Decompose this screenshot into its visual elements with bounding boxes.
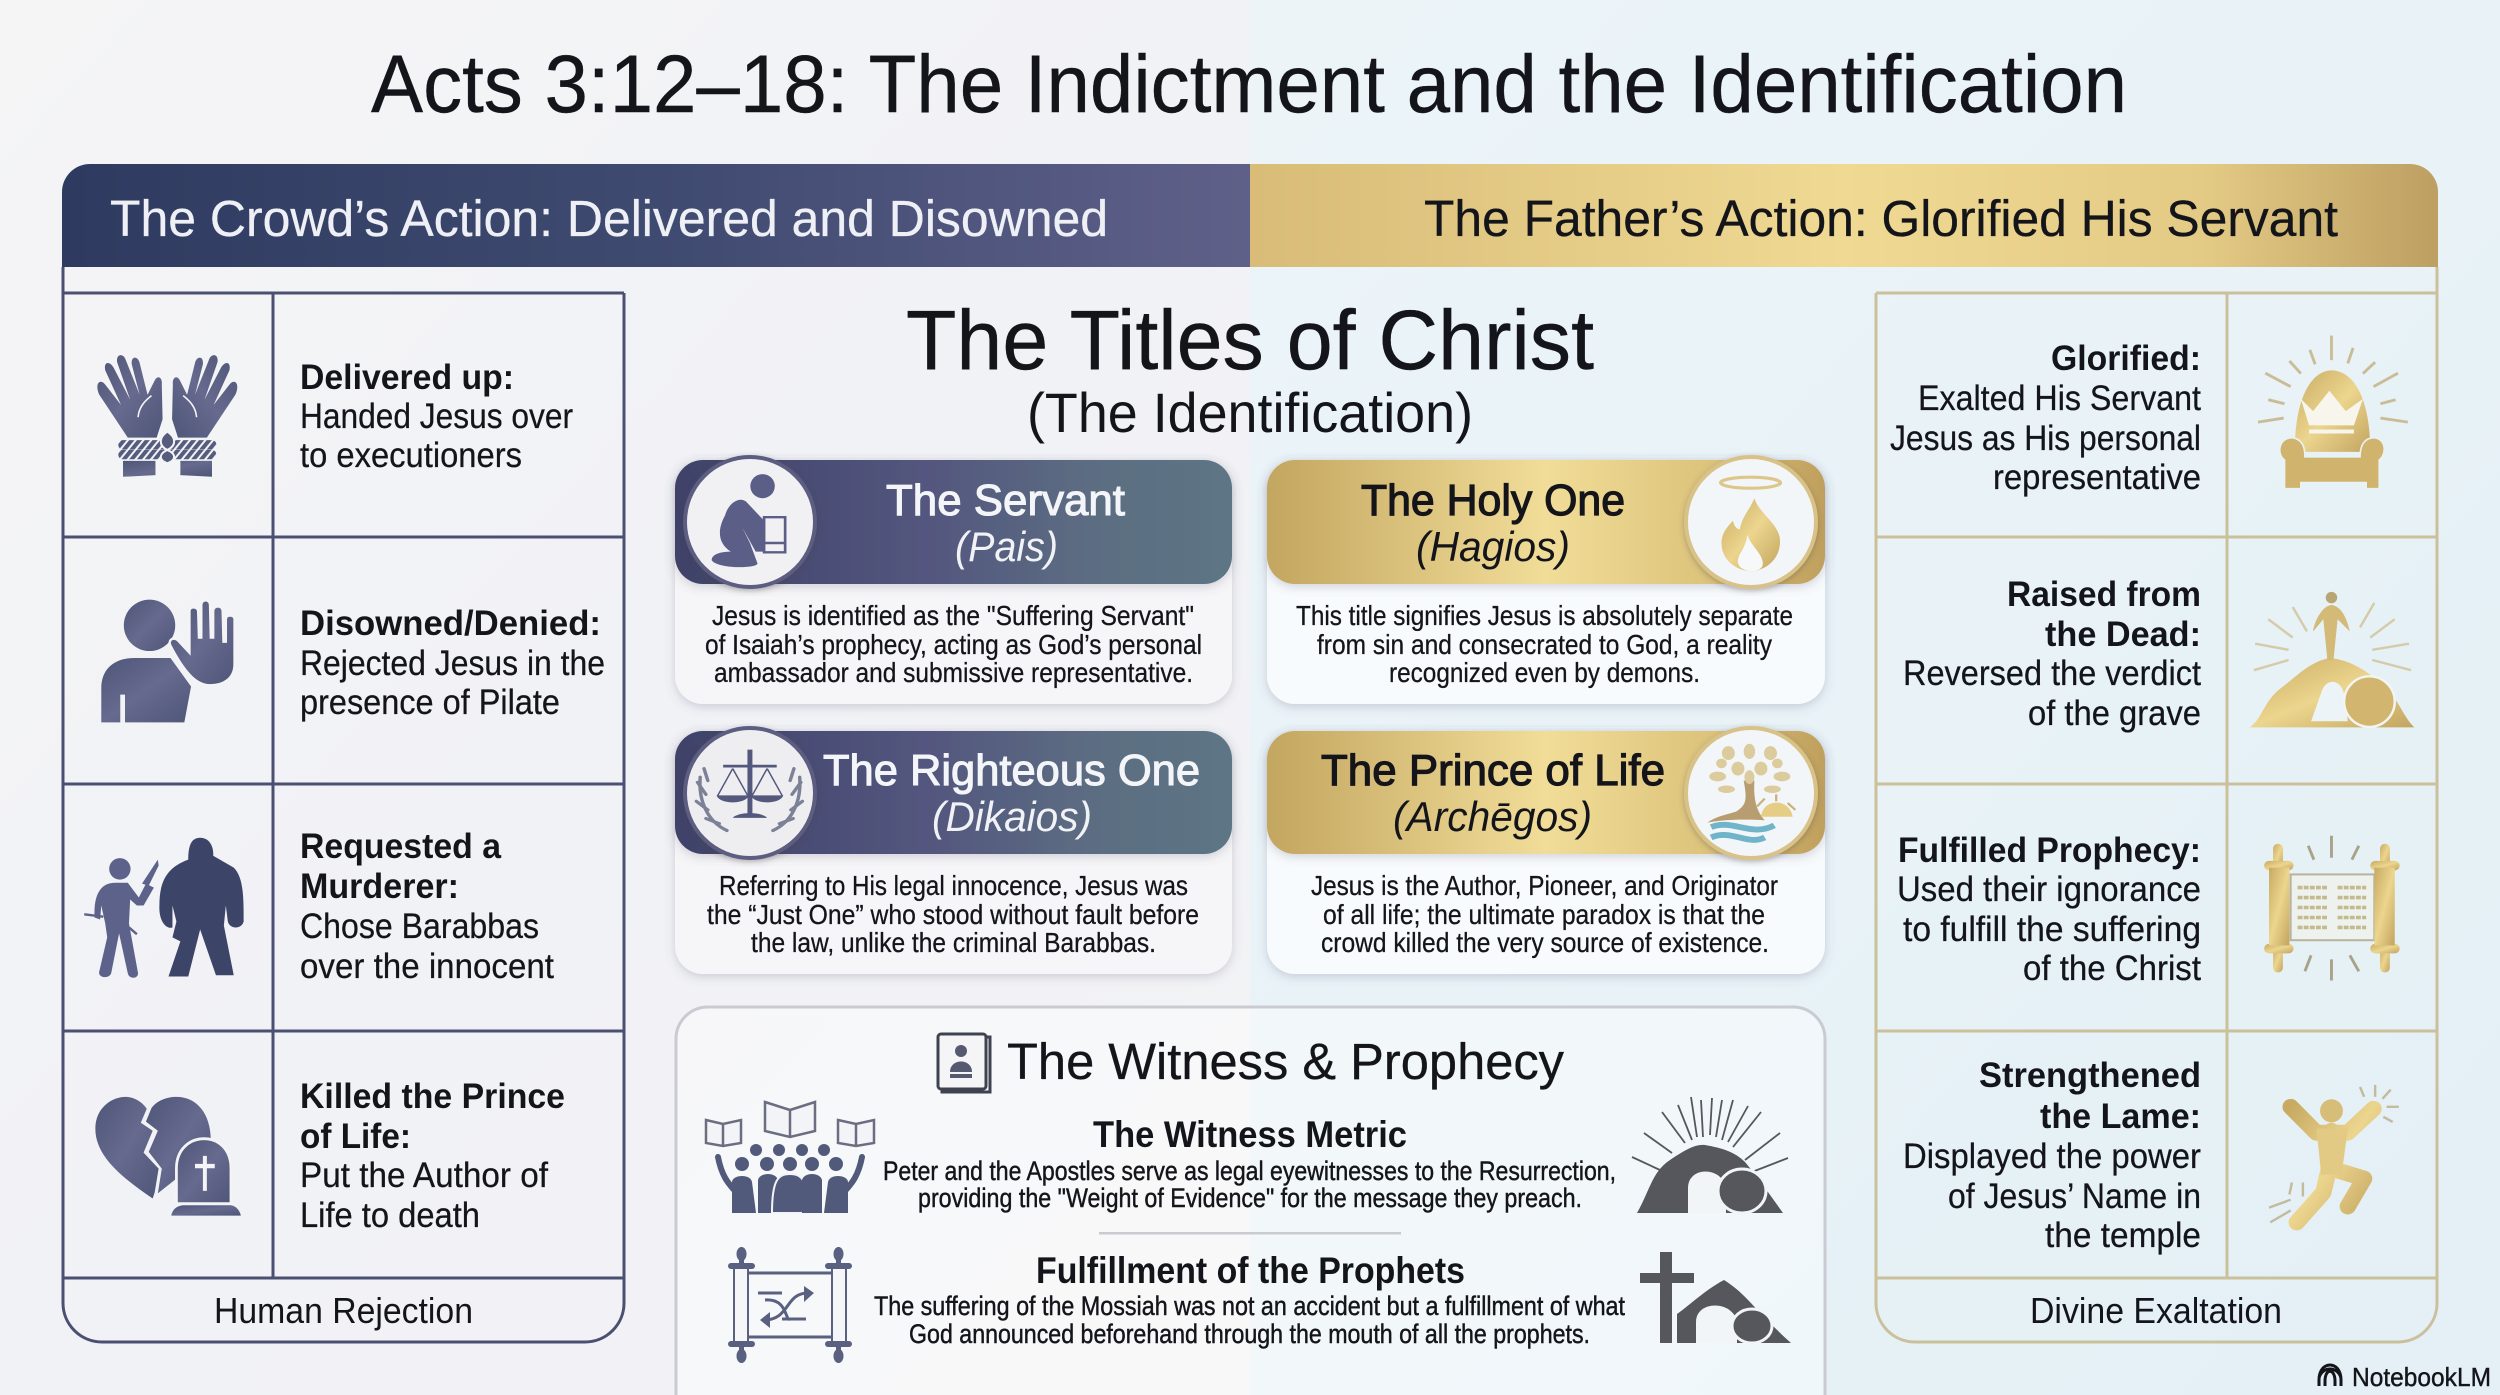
subheading: fulfillment: Fulfillment of the Prophets xyxy=(1036,1250,1465,1291)
card: the holy one xyxy=(1267,457,1825,704)
text: strengthened the lame: Strengthened xyxy=(1979,1056,2201,1095)
icon: scroll with swap arrows xyxy=(728,1247,852,1363)
icon: tree of life xyxy=(1707,744,1795,840)
text: disowned: presence of Pilate xyxy=(300,683,560,722)
text: disowned xyxy=(300,604,605,722)
text: raised from the dead: of the grave xyxy=(2028,694,2201,733)
text: disowned: Disowned/Denied: xyxy=(300,604,601,643)
description: of all life; the ultimate paradox is that the xyxy=(1323,899,1765,930)
text: strengthened the lame xyxy=(1903,1056,2201,1255)
table grid xyxy=(63,267,624,1342)
text: glorified xyxy=(1890,339,2201,497)
text: glorified: representative xyxy=(1993,458,2201,497)
title: Acts 3:12–18: The Indictment and the Identification xyxy=(371,39,2127,130)
title: The Righteous One xyxy=(823,746,1200,795)
text: requested a murderer: Murderer: xyxy=(300,867,459,906)
description: the law, unlike the criminal Barabbas. xyxy=(751,927,1156,958)
text: raised from the dead: Raised from xyxy=(2007,575,2201,614)
title: The Prince of Life xyxy=(1321,746,1665,795)
text: fulfilled prophecy: Fulfilled Prophecy: xyxy=(1898,831,2201,870)
card: the righteous one xyxy=(675,728,1232,974)
icon: kneeling servant xyxy=(712,474,785,567)
text: strengthened the lame: the temple xyxy=(2045,1216,2201,1255)
header banner xyxy=(62,164,2438,267)
description: fulfillment xyxy=(874,1291,1625,1349)
icon: man and murderer xyxy=(84,838,244,978)
description: This title signifies Jesus is absolutely separate xyxy=(1296,600,1793,631)
description xyxy=(1296,600,1793,688)
text: disowned: Rejected Jesus in the xyxy=(300,644,605,683)
subtitle: (Archēgos) xyxy=(1393,793,1592,840)
description: fulfillment: God announced beforehand through the mouth of all the prophets. xyxy=(909,1319,1590,1349)
text: killed the prince: Put the Author of xyxy=(300,1156,548,1195)
text: killed the prince: Killed the Prince xyxy=(300,1077,565,1116)
icon: gold scroll xyxy=(2264,836,2400,980)
text: strengthened the lame: the Lame: xyxy=(2040,1097,2201,1136)
description: fulfillment: The suffering of the Mossiah was not an accident but a fulfillment of what xyxy=(874,1291,1625,1321)
icon: witness book xyxy=(938,1034,990,1092)
icon: halo and flame xyxy=(1721,477,1780,571)
subheading: witness metric: The Witness Metric xyxy=(1093,1114,1407,1155)
text: fulfilled prophecy: to fulfill the suffering xyxy=(1903,910,2201,949)
text: raised from the dead: Reversed the verdict xyxy=(1903,654,2201,693)
icon: crown and throne xyxy=(2258,336,2408,489)
text: killed the prince xyxy=(300,1077,565,1235)
text: strengthened the lame: of Jesus’ Name in xyxy=(1948,1177,2201,1216)
text: killed the prince: of Life: xyxy=(300,1117,411,1156)
icon: apostles with books xyxy=(706,1102,874,1213)
heading: titles of christ: The Titles of Christ xyxy=(906,293,1594,387)
heading: titles of christ: (The Identification) xyxy=(1027,381,1473,444)
text: delivered up xyxy=(300,358,573,475)
text: requested a murderer: over the innocent xyxy=(300,947,554,986)
subtitle: (Dikaios) xyxy=(932,793,1092,840)
text: fulfilled prophecy xyxy=(1897,831,2201,988)
heading: titles of christ xyxy=(906,293,1594,444)
description: witness metric: providing the "Weight of Evidence" for the message they preach. xyxy=(918,1183,1582,1213)
icon: person raising hand xyxy=(101,600,235,722)
icon: cross and tomb xyxy=(1640,1252,1791,1343)
text: raised from the dead xyxy=(1903,575,2201,733)
text: strengthened the lame: Displayed the power xyxy=(1903,1137,2201,1176)
description: Jesus is identified as the "Suffering Servant" xyxy=(712,600,1194,631)
text: delivered up: to executioners xyxy=(300,436,522,475)
description: of Isaiah’s prophecy, acting as God’s personal xyxy=(705,629,1202,660)
subtitle: (Hagios) xyxy=(1416,523,1570,570)
icon: leaping man xyxy=(2269,1085,2399,1222)
description: ambassador and submissive representative. xyxy=(714,657,1193,688)
description: witness metric: Peter and the Apostles serve as legal eyewitnesses to the Resurrection, xyxy=(883,1156,1616,1186)
description: Jesus is the Author, Pioneer, and Originator xyxy=(1311,870,1778,901)
icon: risen figure over tomb xyxy=(2250,592,2414,727)
text: delivered up: Delivered up: xyxy=(300,358,514,397)
label: divine exaltation: Divine Exaltation xyxy=(2030,1290,2282,1331)
logo: notebooklm: NotebookLM xyxy=(2352,1362,2491,1392)
title: The Holy One xyxy=(1361,476,1625,525)
description: witness metric xyxy=(883,1156,1616,1213)
panel: divine exaltation xyxy=(1876,267,2437,1342)
heading: The Witness & Prophecy xyxy=(1007,1033,1564,1090)
label: human rejection: Human Rejection xyxy=(214,1290,473,1331)
text: delivered up: Handed Jesus over xyxy=(300,397,573,436)
text: fulfilled prophecy: of the Christ xyxy=(2023,949,2201,988)
text: killed the prince: Life to death xyxy=(300,1196,480,1235)
text: requested a murderer: Chose Barabbas xyxy=(300,907,539,946)
description: from sin and consecrated to God, a reality xyxy=(1317,629,1772,660)
panel: witness and prophecy xyxy=(676,1007,1825,1395)
text: glorified: Exalted His Servant xyxy=(1918,379,2201,418)
text: raised from the dead: the Dead: xyxy=(2045,615,2201,654)
description: the “Just One” who stood without fault before xyxy=(707,899,1199,930)
description xyxy=(707,870,1199,958)
icon: bound hands xyxy=(97,355,237,477)
heading: crowd's action: The Crowd’s Action: Delivered and Disowned xyxy=(110,190,1108,247)
card: the servant xyxy=(675,457,1232,704)
text: glorified: Jesus as His personal xyxy=(1890,419,2201,458)
panel: human rejection xyxy=(63,267,624,1342)
divider xyxy=(1099,1232,1401,1234)
description: Referring to His legal innocence, Jesus was xyxy=(719,870,1188,901)
card: the prince of life xyxy=(1267,728,1825,974)
icon: scales and laurel xyxy=(696,750,802,831)
text: fulfilled prophecy: Used their ignorance xyxy=(1897,870,2201,909)
heading: father's action: The Father’s Action: Glorified His Servant xyxy=(1424,190,2338,247)
text: glorified: Glorified: xyxy=(2051,339,2201,378)
icon: broken heart and tombstone xyxy=(95,1097,241,1216)
title: The Servant xyxy=(886,476,1125,525)
description: crowd killed the very source of existence. xyxy=(1321,927,1769,958)
description xyxy=(1311,870,1778,958)
table grid xyxy=(1876,267,2437,1342)
description xyxy=(705,600,1202,688)
subtitle: (Pais) xyxy=(955,523,1058,570)
icon: empty tomb with rays xyxy=(1632,1097,1788,1213)
text: requested a murderer xyxy=(300,827,554,986)
text: requested a murderer: Requested a xyxy=(300,827,502,866)
description: recognized even by demons. xyxy=(1389,657,1700,688)
